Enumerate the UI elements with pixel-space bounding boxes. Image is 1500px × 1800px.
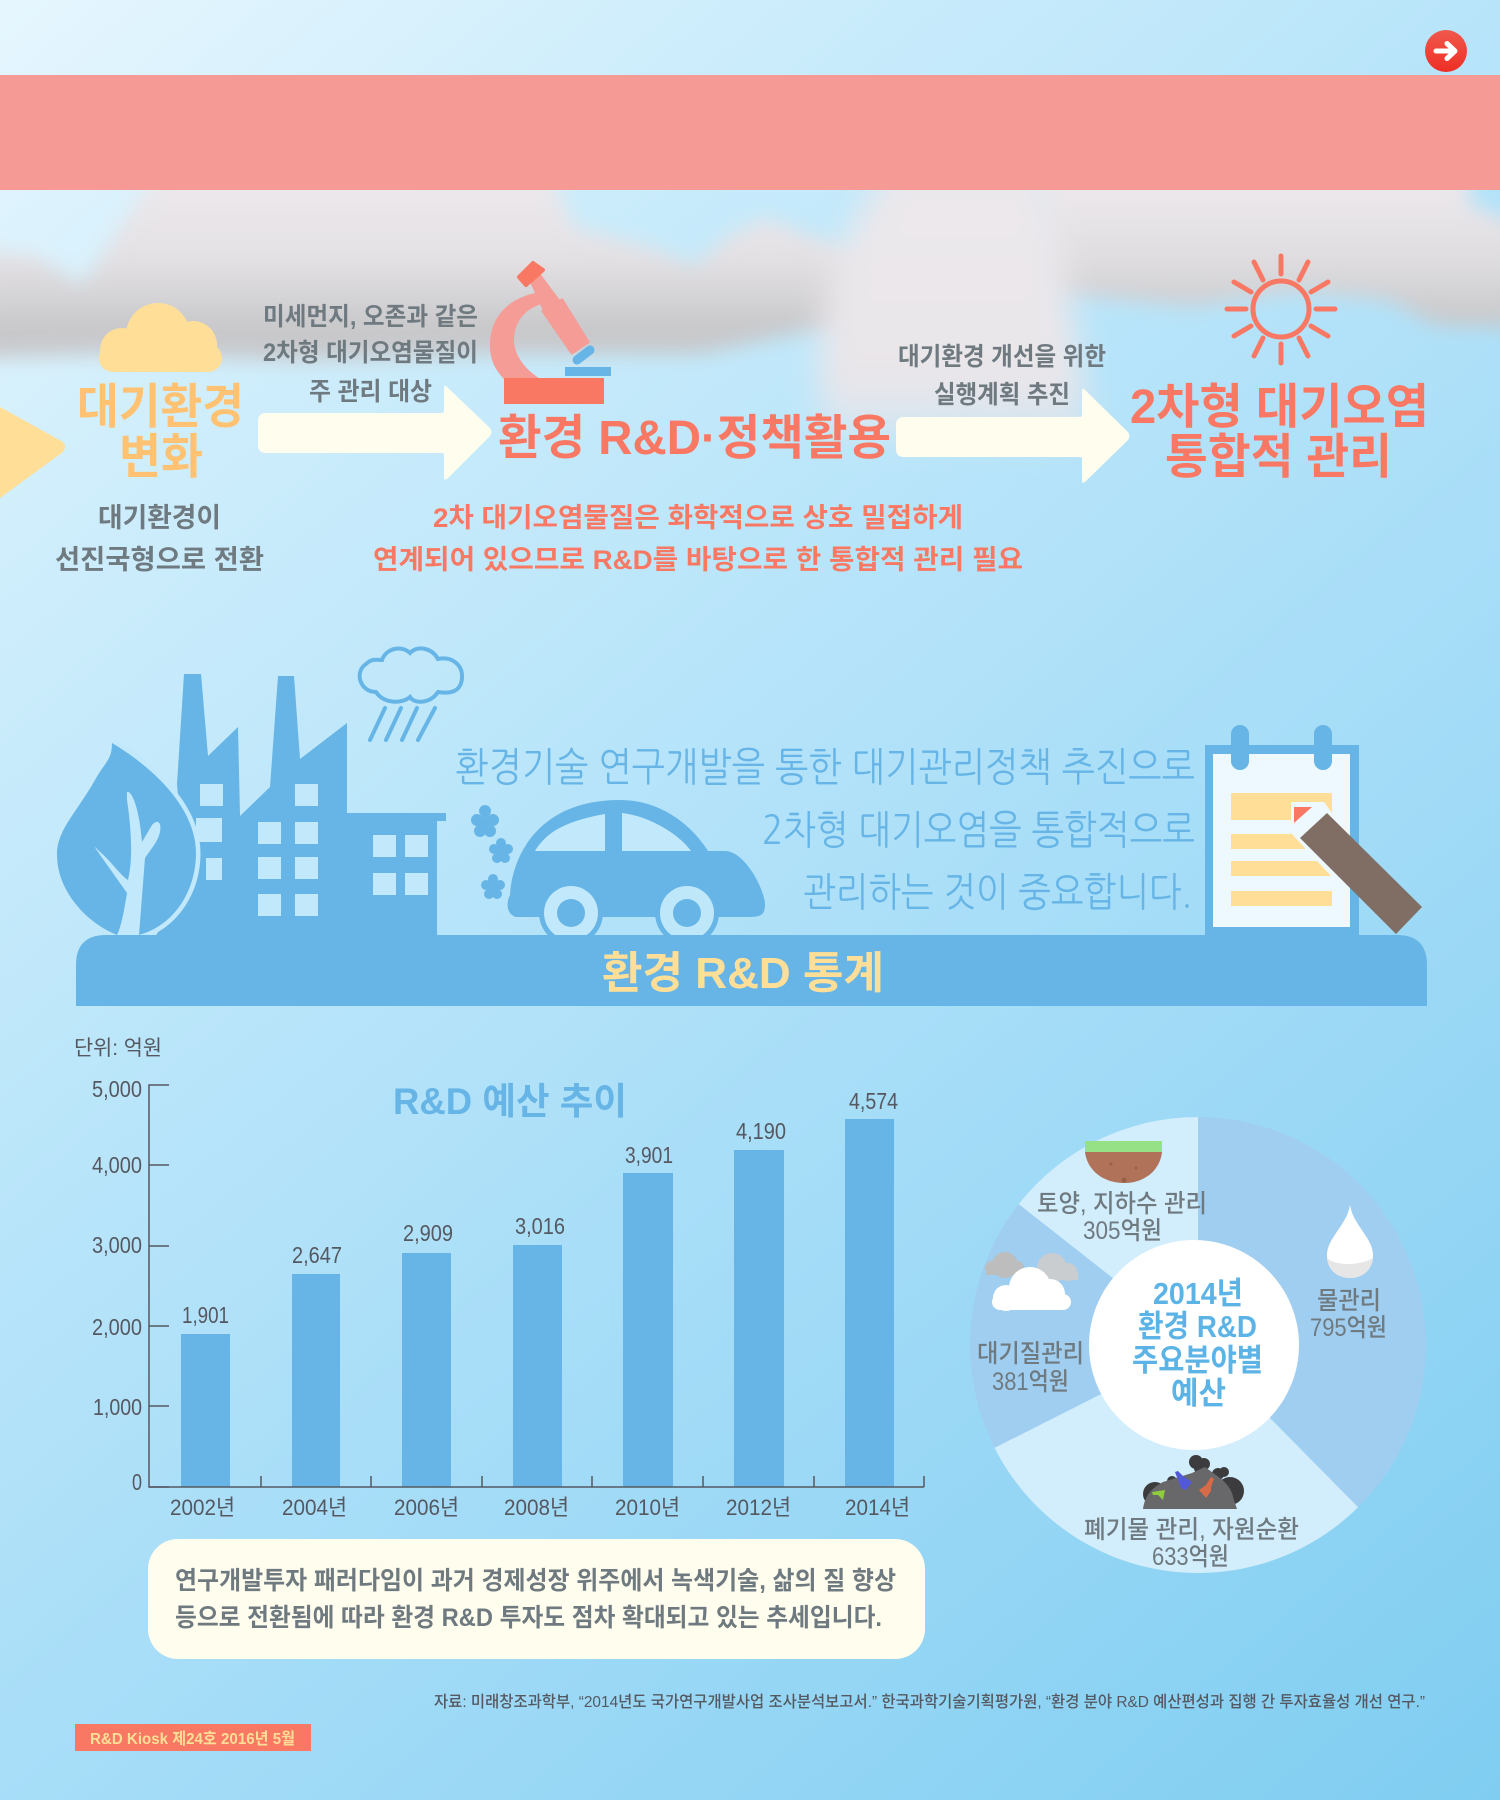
label: air quality: 381억원 bbox=[992, 1368, 1069, 1396]
label: air quality bbox=[977, 1340, 1084, 1396]
year labels: 2014년 bbox=[845, 1495, 910, 1520]
value labels bbox=[182, 1088, 898, 1328]
value labels: 4,574 bbox=[849, 1088, 898, 1114]
label: soil: 305억원 bbox=[1083, 1217, 1162, 1245]
icon: exhaust puffs bbox=[471, 805, 513, 899]
y axis labels: 3,000 bbox=[92, 1232, 142, 1258]
panel: city illustration bbox=[57, 648, 1422, 945]
centre title: 2014년 bbox=[1153, 1276, 1243, 1311]
heading: air environment change bbox=[77, 381, 244, 484]
label: waste: 633억원 bbox=[1152, 1543, 1229, 1571]
year labels: 2006년 bbox=[394, 1495, 459, 1520]
axes bbox=[149, 1085, 924, 1487]
centre title: 예산 bbox=[1171, 1376, 1226, 1411]
callout: investment trend: 연구개발투자 패러다임이 과거 경제성장 위주에서 녹색기술, 삶의 질 향상 bbox=[175, 1567, 896, 1595]
icon: microscope bbox=[490, 263, 611, 404]
y axis labels: 2,000 bbox=[92, 1314, 142, 1340]
year labels: 2010년 bbox=[615, 1495, 680, 1520]
year labels: 2012년 bbox=[726, 1495, 791, 1520]
callout: investment trend: 등으로 전환됨에 따라 환경 R&D 투자도 점차 확대되고 있는 추세입니다. bbox=[175, 1604, 882, 1632]
icon: water drop bbox=[1327, 1205, 1373, 1278]
text: integrated management need bbox=[373, 503, 1023, 575]
icon: sun bbox=[1227, 256, 1335, 363]
heading banner: environment R&D statistics: 환경 R&D 통계 bbox=[602, 949, 884, 998]
value labels: 2,647 bbox=[292, 1242, 342, 1268]
text: transition to developed type: 대기환경이 bbox=[98, 503, 221, 533]
value labels: 3,016 bbox=[515, 1213, 565, 1239]
publication badge: R&D Kiosk 제24호 2016년 5월 bbox=[90, 1730, 295, 1748]
label: soil: 토양, 지하수 관리 bbox=[1037, 1190, 1207, 1218]
y axis labels: 0 bbox=[132, 1469, 142, 1495]
y axis labels bbox=[92, 1076, 142, 1495]
segment: soil bbox=[1019, 1117, 1198, 1345]
value labels: 2,909 bbox=[403, 1220, 453, 1246]
icon: soil bbox=[1085, 1141, 1162, 1183]
background clouds bbox=[0, 165, 1500, 445]
label: water: 물관리 bbox=[1317, 1287, 1381, 1315]
text: integrated management need: 연계되어 있으므로 R&D를 바탕으로 한 통합적 관리 필요 bbox=[373, 545, 1023, 575]
segment: air bbox=[970, 1204, 1198, 1448]
icon: car bbox=[508, 800, 765, 945]
text: action plan: 실행계획 추진 bbox=[934, 381, 1070, 409]
handwritten message bbox=[455, 747, 1195, 912]
handwritten message: 환경기술 연구개발을 통한 대기관리정책 추진으로 bbox=[455, 747, 1195, 787]
year labels: 2008년 bbox=[504, 1495, 569, 1520]
text: secondary pollutants: 주 관리 대상 bbox=[309, 378, 432, 406]
heading: integrated management: 2차형 대기오염 bbox=[1130, 381, 1429, 434]
centre title bbox=[1132, 1276, 1263, 1411]
panel: air quality flow bbox=[0, 256, 1429, 575]
text: integrated management need: 2차 대기오염물질은 화학적으로 상호 밀접하게 bbox=[433, 503, 963, 533]
heading: integrated management: 통합적 관리 bbox=[1165, 431, 1392, 484]
y axis labels: 4,000 bbox=[92, 1152, 142, 1178]
heading: integrated management bbox=[1130, 381, 1429, 484]
icon: yellow cloud bbox=[99, 303, 222, 372]
label: waste bbox=[1084, 1516, 1299, 1571]
left pointer triangle bbox=[0, 407, 65, 498]
donut centre bbox=[1089, 1240, 1299, 1450]
bars bbox=[181, 1119, 894, 1487]
segment: water bbox=[1198, 1117, 1426, 1507]
handwritten message: 관리하는 것이 중요합니다. bbox=[803, 872, 1192, 912]
text: secondary pollutants: 2차형 대기오염물질이 bbox=[263, 339, 478, 367]
year labels: 2004년 bbox=[282, 1495, 347, 1520]
label: water bbox=[1310, 1287, 1387, 1342]
value labels: 3,901 bbox=[625, 1142, 673, 1168]
text: action plan bbox=[898, 343, 1106, 409]
factory silhouette bbox=[153, 674, 446, 940]
heading: environment R&D policy use: 환경 R&D·정책활용 bbox=[498, 412, 891, 465]
y axis labels: 5,000 bbox=[92, 1076, 142, 1102]
bar chart: R&D budget trend bbox=[74, 1037, 924, 1520]
y axis labels: 1,000 bbox=[93, 1394, 142, 1420]
label: water: 795억원 bbox=[1310, 1314, 1387, 1342]
publication badge bbox=[75, 1724, 311, 1751]
value labels: 1,901 bbox=[182, 1302, 229, 1328]
label: waste: 폐기물 관리, 자원순환 bbox=[1084, 1516, 1299, 1544]
callout: investment trend bbox=[148, 1539, 925, 1659]
label: soil bbox=[1037, 1190, 1207, 1245]
chart title: R&D 예산 추이 bbox=[393, 1081, 627, 1122]
centre title: 주요분야별 bbox=[1132, 1343, 1263, 1378]
label: air quality: 대기질관리 bbox=[977, 1340, 1084, 1368]
centre title: 환경 R&D bbox=[1138, 1309, 1257, 1344]
handwritten message: 2차형 대기오염을 통합적으로 bbox=[762, 810, 1195, 850]
icon: next arrow button bbox=[1425, 30, 1467, 72]
value labels: 4,190 bbox=[736, 1118, 786, 1144]
icon: clouds bbox=[985, 1252, 1078, 1311]
arrow 1 bbox=[258, 386, 492, 480]
donut chart: 2014 budget by field bbox=[970, 1117, 1426, 1573]
text: secondary pollutants bbox=[263, 303, 478, 406]
text: transition to developed type bbox=[55, 503, 264, 575]
heading: air environment change: 대기환경 bbox=[77, 381, 244, 434]
text: secondary pollutants: 미세먼지, 오존과 같은 bbox=[263, 303, 478, 331]
year labels: 2002년 bbox=[170, 1495, 235, 1520]
unit label: 단위: 억원 bbox=[74, 1037, 162, 1060]
segment: waste bbox=[994, 1345, 1358, 1573]
source note: 자료: 미래창조과학부, “2014년도 국가연구개발사업 조사분석보고서.” 한국과학기술기획평가원, “환경 분야 R&D 예산편성과 집행 간 투자효율성 개선 연구.” bbox=[434, 1693, 1425, 1711]
icon: clipboard with pencil bbox=[1205, 725, 1422, 935]
text: action plan: 대기환경 개선을 위한 bbox=[898, 343, 1106, 371]
arrow 2 bbox=[896, 389, 1130, 483]
icon: rain cloud bbox=[360, 648, 462, 740]
top banner band bbox=[0, 75, 1500, 190]
icon: waste pile bbox=[1143, 1455, 1244, 1509]
year labels bbox=[170, 1495, 910, 1520]
heading banner: environment R&D statistics bbox=[76, 935, 1427, 1006]
heading: air environment change: 변화 bbox=[119, 431, 203, 484]
text: transition to developed type: 선진국형으로 전환 bbox=[55, 545, 264, 575]
icon: leaf tree bbox=[57, 743, 196, 935]
